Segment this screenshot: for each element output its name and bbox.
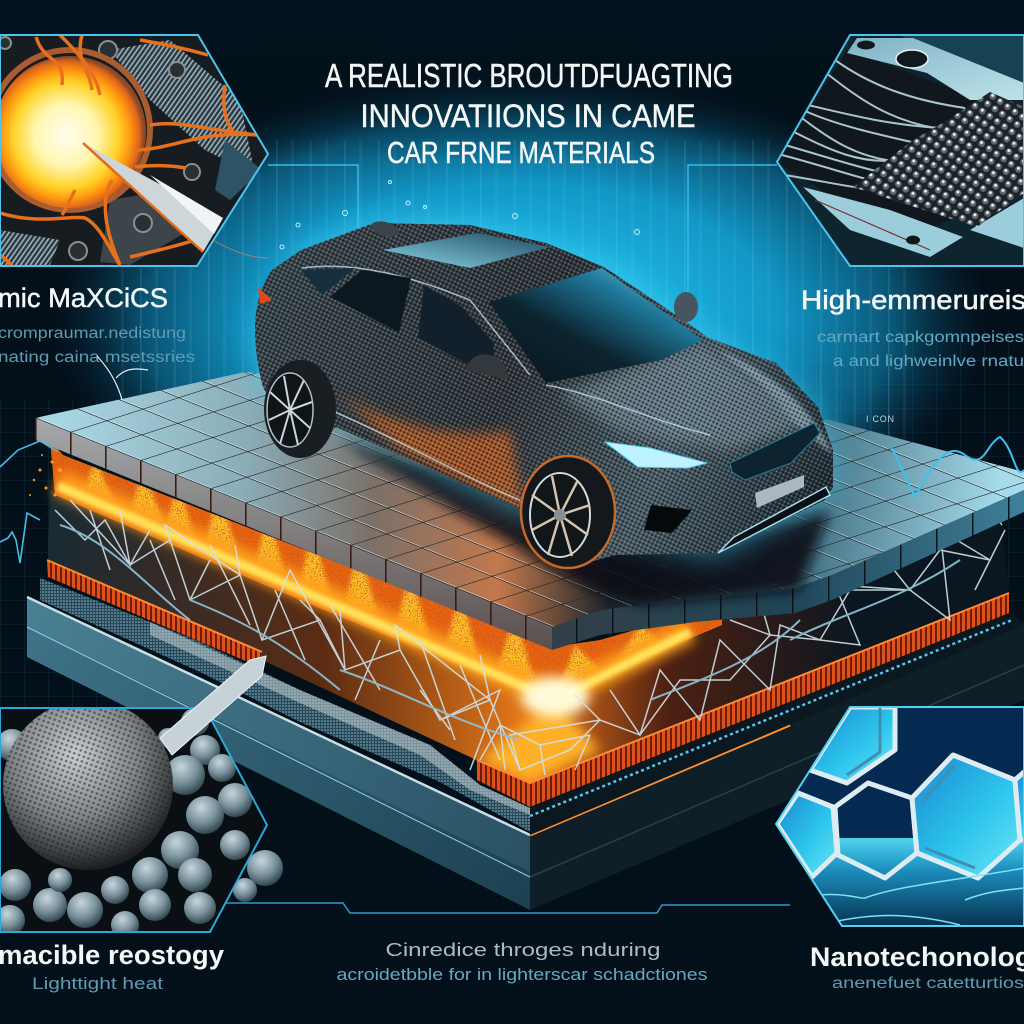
label: machinable technology xyxy=(0,940,224,993)
label: high-temperature xyxy=(801,285,1024,424)
right dark ledge xyxy=(530,612,1024,835)
label: machinable technology: Lighttight heat xyxy=(32,974,163,993)
sparks xyxy=(29,454,62,496)
panel: high-temperature material xyxy=(770,35,1024,270)
title xyxy=(325,57,733,170)
platform base xyxy=(27,578,1024,910)
flames xyxy=(86,466,657,682)
lower left plate xyxy=(803,187,963,257)
coils xyxy=(116,40,252,162)
left lower slab xyxy=(27,627,530,910)
waveform right xyxy=(892,437,1024,497)
front door window xyxy=(418,285,494,363)
panel: ceramic matrix fireball xyxy=(0,35,270,268)
spilled spheres xyxy=(233,850,283,902)
label: nanotechnology xyxy=(810,942,1024,992)
background glow xyxy=(0,0,1024,730)
lower intake xyxy=(718,487,830,553)
left intake xyxy=(644,505,692,533)
car glow xyxy=(255,223,833,553)
label: high-temperature: a and lighweinlve rnatu xyxy=(833,353,1024,370)
left upper slab xyxy=(27,597,530,872)
title: INNOVATIIONS IN CAME xyxy=(360,98,696,134)
sunroof xyxy=(383,233,550,268)
right slab xyxy=(530,622,1024,910)
front wheel xyxy=(521,456,615,568)
panel outline: ceramic xyxy=(0,35,268,266)
small spheres xyxy=(0,708,252,939)
ring xyxy=(0,50,150,210)
left tile faces xyxy=(35,418,552,650)
label: center caption xyxy=(336,940,708,984)
tile top surface xyxy=(35,372,1024,627)
glowing heat layer xyxy=(29,430,740,720)
label: high-temperature: High-emmerureis xyxy=(801,285,1024,315)
far mirror xyxy=(674,292,698,322)
label: nanotechnology: anenefuet catetturtios xyxy=(832,975,1024,992)
water xyxy=(813,838,1023,925)
ceramic tiles xyxy=(35,372,1024,650)
title: A REALISTIC BROUTDFUAGTING xyxy=(325,57,733,94)
car shadow on tiles xyxy=(340,440,830,605)
lower right plate xyxy=(970,198,1024,248)
beads mass xyxy=(853,92,1024,227)
needle xyxy=(83,143,223,252)
probe xyxy=(160,656,266,755)
label: ceramic matrix: crompraumar.nedistung xyxy=(0,325,186,342)
body crease highlights xyxy=(302,266,710,500)
label: ceramic matrix: mic MaXCiCS xyxy=(0,283,168,313)
connector lines xyxy=(217,165,790,913)
taillight xyxy=(258,287,272,304)
wire bundle xyxy=(782,60,965,188)
roof fin xyxy=(370,219,400,239)
big textured sphere xyxy=(3,700,173,870)
side mirror xyxy=(466,354,508,380)
panel outline: nano xyxy=(776,707,1024,926)
orange honeycomb band xyxy=(47,560,1009,807)
orange wires xyxy=(0,35,258,268)
waveform left xyxy=(0,441,58,563)
hexagon inner frames xyxy=(847,707,975,868)
water droplets xyxy=(280,180,640,249)
label: high-temperature: I CON xyxy=(866,414,894,424)
car xyxy=(255,219,833,568)
grille xyxy=(730,423,820,480)
glowing hexagons xyxy=(777,707,1024,878)
right tile faces xyxy=(552,490,1024,650)
rear wheel xyxy=(264,360,336,458)
label: high-temperature: carmart capkgomnpeises xyxy=(817,329,1024,346)
label: ceramic matrix: nating caina msetssries xyxy=(0,349,195,366)
label: machinable technology: macible reostogy xyxy=(0,940,224,970)
panel: nanotechnology hexagons xyxy=(770,707,1024,928)
rear quarter window xyxy=(301,268,355,295)
upper plate xyxy=(847,38,1024,100)
panel outline: high-temp xyxy=(777,35,1024,266)
label: ceramic matrix xyxy=(0,283,195,366)
car body xyxy=(255,223,833,568)
title: CAR FRNE MATERIALS xyxy=(387,135,655,170)
probe wire xyxy=(213,240,268,258)
orange side reflection xyxy=(340,345,833,515)
label: center caption: Cinredice throges nduring xyxy=(386,940,660,960)
plate xyxy=(755,475,804,508)
metallic mesh xyxy=(55,500,1005,775)
bolts xyxy=(0,37,200,260)
gravel layer xyxy=(40,578,530,832)
rear door window xyxy=(330,270,411,332)
panel: machinable technology spheres xyxy=(0,700,283,939)
windshield xyxy=(489,268,703,383)
label: center caption: acroidetbble for in lighterscar schadctiones xyxy=(336,966,708,984)
headlight xyxy=(605,442,707,468)
panel outline: spheres xyxy=(0,708,267,932)
callout line xyxy=(97,356,148,400)
mesh zones xyxy=(48,490,1009,785)
label: nanotechnology: Nanotechonolog xyxy=(810,942,1024,972)
